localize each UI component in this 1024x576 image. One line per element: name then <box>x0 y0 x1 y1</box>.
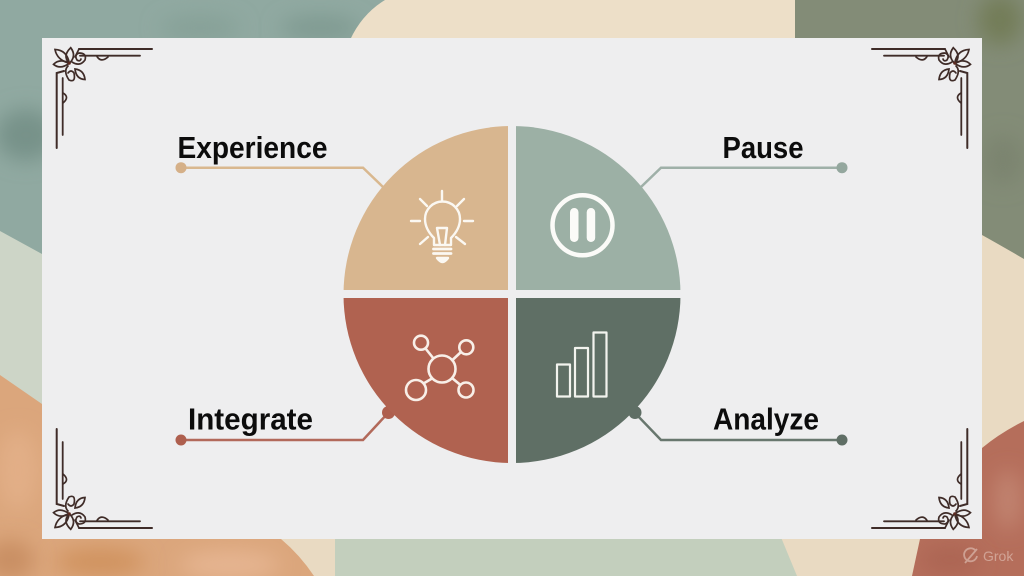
icon: light bulb <box>411 191 473 262</box>
quadrant: Experience <box>340 120 508 290</box>
corner ornament: top left <box>54 48 152 148</box>
label: Analyze: Analyze <box>713 402 819 436</box>
white panel <box>42 38 982 539</box>
corner ornament: bottom right <box>872 429 970 529</box>
connector: Experience <box>176 162 383 187</box>
corner ornament: bottom left <box>54 429 152 529</box>
four-part circle <box>340 120 684 468</box>
label: Integrate: Integrate <box>188 402 313 436</box>
background: orange wash <box>0 370 320 576</box>
label: Pause: Pause <box>722 130 804 165</box>
connector: Integrate <box>176 406 395 446</box>
connector: Pause <box>641 162 848 187</box>
icon: pause <box>552 195 612 255</box>
background: olive wash <box>790 0 1024 262</box>
watermark: Grok <box>964 548 1014 564</box>
quadrant: Analyze <box>516 298 684 468</box>
connector: Analyze <box>628 406 848 446</box>
icon: bar chart <box>557 332 606 396</box>
corner ornament: top right <box>872 48 970 148</box>
quadrant: Pause <box>516 120 684 290</box>
quadrant: Integrate <box>340 298 508 468</box>
label: Experience: Experience <box>178 130 328 165</box>
icon: network nodes <box>406 336 474 400</box>
background: terracotta wash <box>905 415 1024 576</box>
background: teal wash <box>0 0 400 260</box>
background: bottom sage wash <box>335 530 797 576</box>
watermark: Grok: Grok <box>983 548 1014 564</box>
background: pale green wash <box>0 225 60 420</box>
